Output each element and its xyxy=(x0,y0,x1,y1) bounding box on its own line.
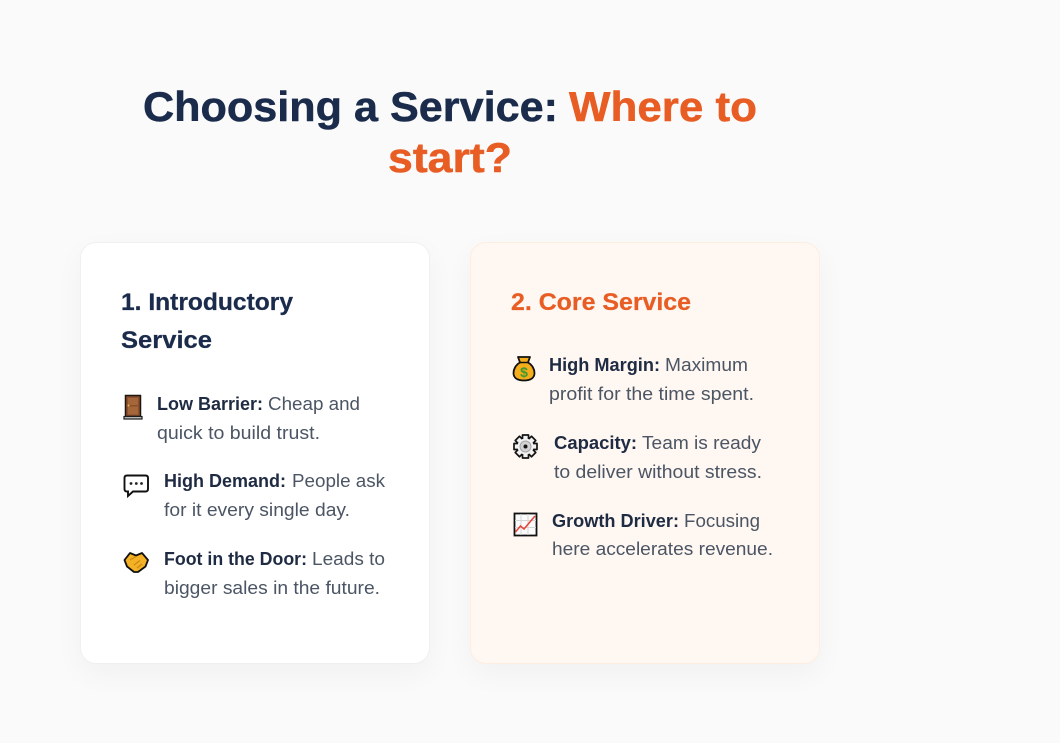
icon: handshake xyxy=(124,553,148,572)
item: Capacity: to deliver without stress. xyxy=(554,462,762,482)
title: start? xyxy=(388,134,512,181)
item: High Margin: profit for the time spent. xyxy=(549,384,754,404)
heading: 1. Introductory Service xyxy=(121,289,294,354)
panel: core service card background xyxy=(470,242,820,664)
title: Choosing a Service: xyxy=(143,83,558,130)
item: Foot in the Door xyxy=(124,549,385,598)
heading: 1. Introductory Service: 1. Introductory xyxy=(121,289,294,316)
item: Foot in the Door: Leads to xyxy=(312,549,385,569)
icon: door xyxy=(124,396,142,419)
icon: gear xyxy=(514,435,537,458)
item: High Margin: High Margin: xyxy=(549,355,660,375)
title xyxy=(143,83,757,181)
item: Growth Driver: Focusing xyxy=(684,511,760,531)
title: Where to xyxy=(569,83,757,130)
item: High Margin xyxy=(514,355,754,404)
item: Low Barrier: quick to build trust. xyxy=(157,423,320,443)
icon: speech bubble xyxy=(124,476,148,496)
item: Capacity xyxy=(514,433,762,482)
heading: 2. Core Service: 2. Core Service xyxy=(511,289,691,316)
item: High Demand: for it every single day. xyxy=(164,500,350,520)
item: High Margin: Maximum xyxy=(665,355,748,375)
item: Capacity: Team is ready xyxy=(642,433,761,453)
icon: money bag xyxy=(514,357,534,380)
item: High Demand: People ask xyxy=(292,471,386,491)
icon: chart increasing xyxy=(514,514,536,536)
panel: introductory service card background xyxy=(80,242,430,664)
item: Growth Driver: here accelerates revenue. xyxy=(552,539,773,559)
item: Foot in the Door: bigger sales in the future. xyxy=(164,578,380,598)
item: Low Barrier xyxy=(124,394,360,443)
icon: money bag: $ xyxy=(520,364,528,380)
item: Growth Driver: Growth Driver: xyxy=(552,511,679,531)
item: High Demand: High Demand: xyxy=(164,471,286,491)
item: Growth Driver xyxy=(514,511,773,559)
item: Capacity: Capacity: xyxy=(554,433,637,453)
item: Low Barrier: Low Barrier: xyxy=(157,394,263,414)
item: High Demand xyxy=(124,471,386,520)
item: Low Barrier: Cheap and xyxy=(268,394,360,414)
heading: 1. Introductory Service: Service xyxy=(121,327,212,354)
item: Foot in the Door: Foot in the Door: xyxy=(164,549,307,569)
